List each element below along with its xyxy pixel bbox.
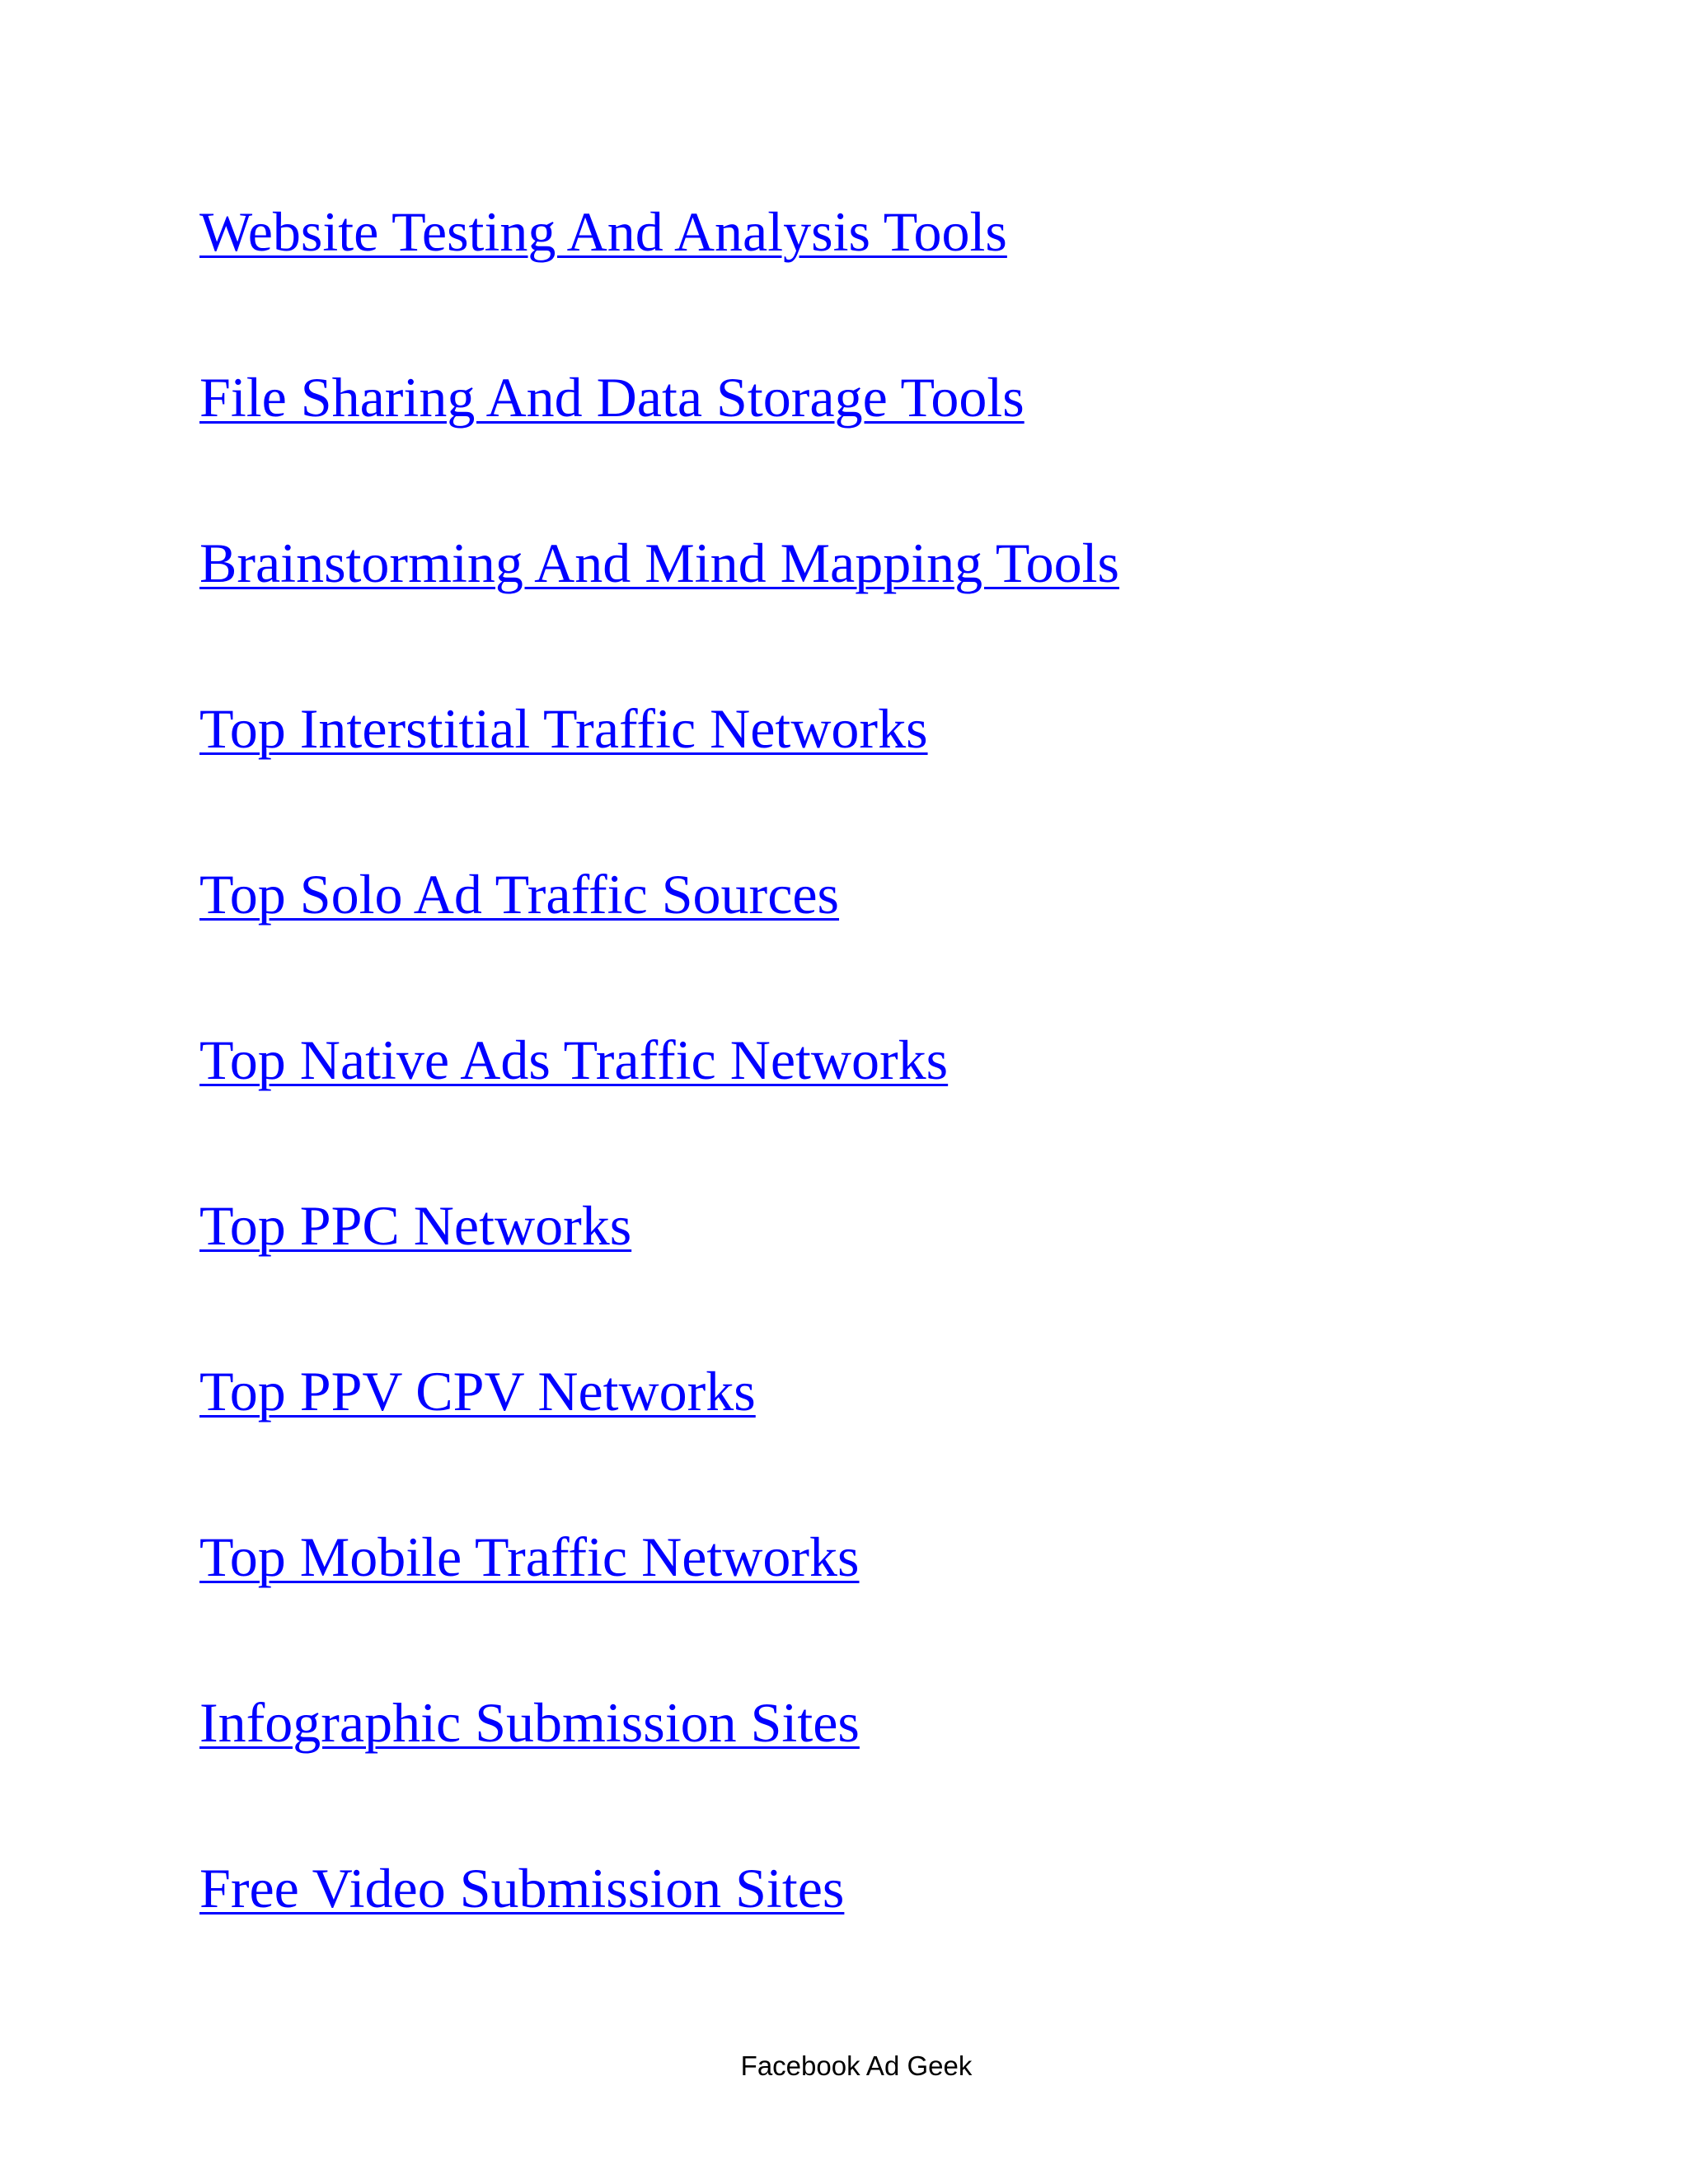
link: file sharing: File Sharing And Data Storage Tools xyxy=(199,366,1025,429)
link: solo ad: Top Solo Ad Traffic Sources xyxy=(199,863,839,926)
link: website testing: Website Testing And Analysis Tools xyxy=(199,200,1007,263)
link: brainstorming: Brainstorming And Mind Mapping Tools xyxy=(199,532,1119,594)
link: interstitial: Top Interstitial Traffic Networks xyxy=(199,697,928,760)
link: native ads: Top Native Ads Traffic Networks xyxy=(199,1029,948,1091)
link: ppc: Top PPC Networks xyxy=(199,1194,631,1257)
link: video: Free Video Submission Sites xyxy=(199,1857,844,1919)
link: mobile: Top Mobile Traffic Networks xyxy=(199,1526,859,1588)
link: infographic: Infographic Submission Sites xyxy=(199,1691,860,1754)
link: ppv cpv: Top PPV CPV Networks xyxy=(199,1360,756,1422)
footer: Facebook Ad Geek xyxy=(741,2050,972,2081)
